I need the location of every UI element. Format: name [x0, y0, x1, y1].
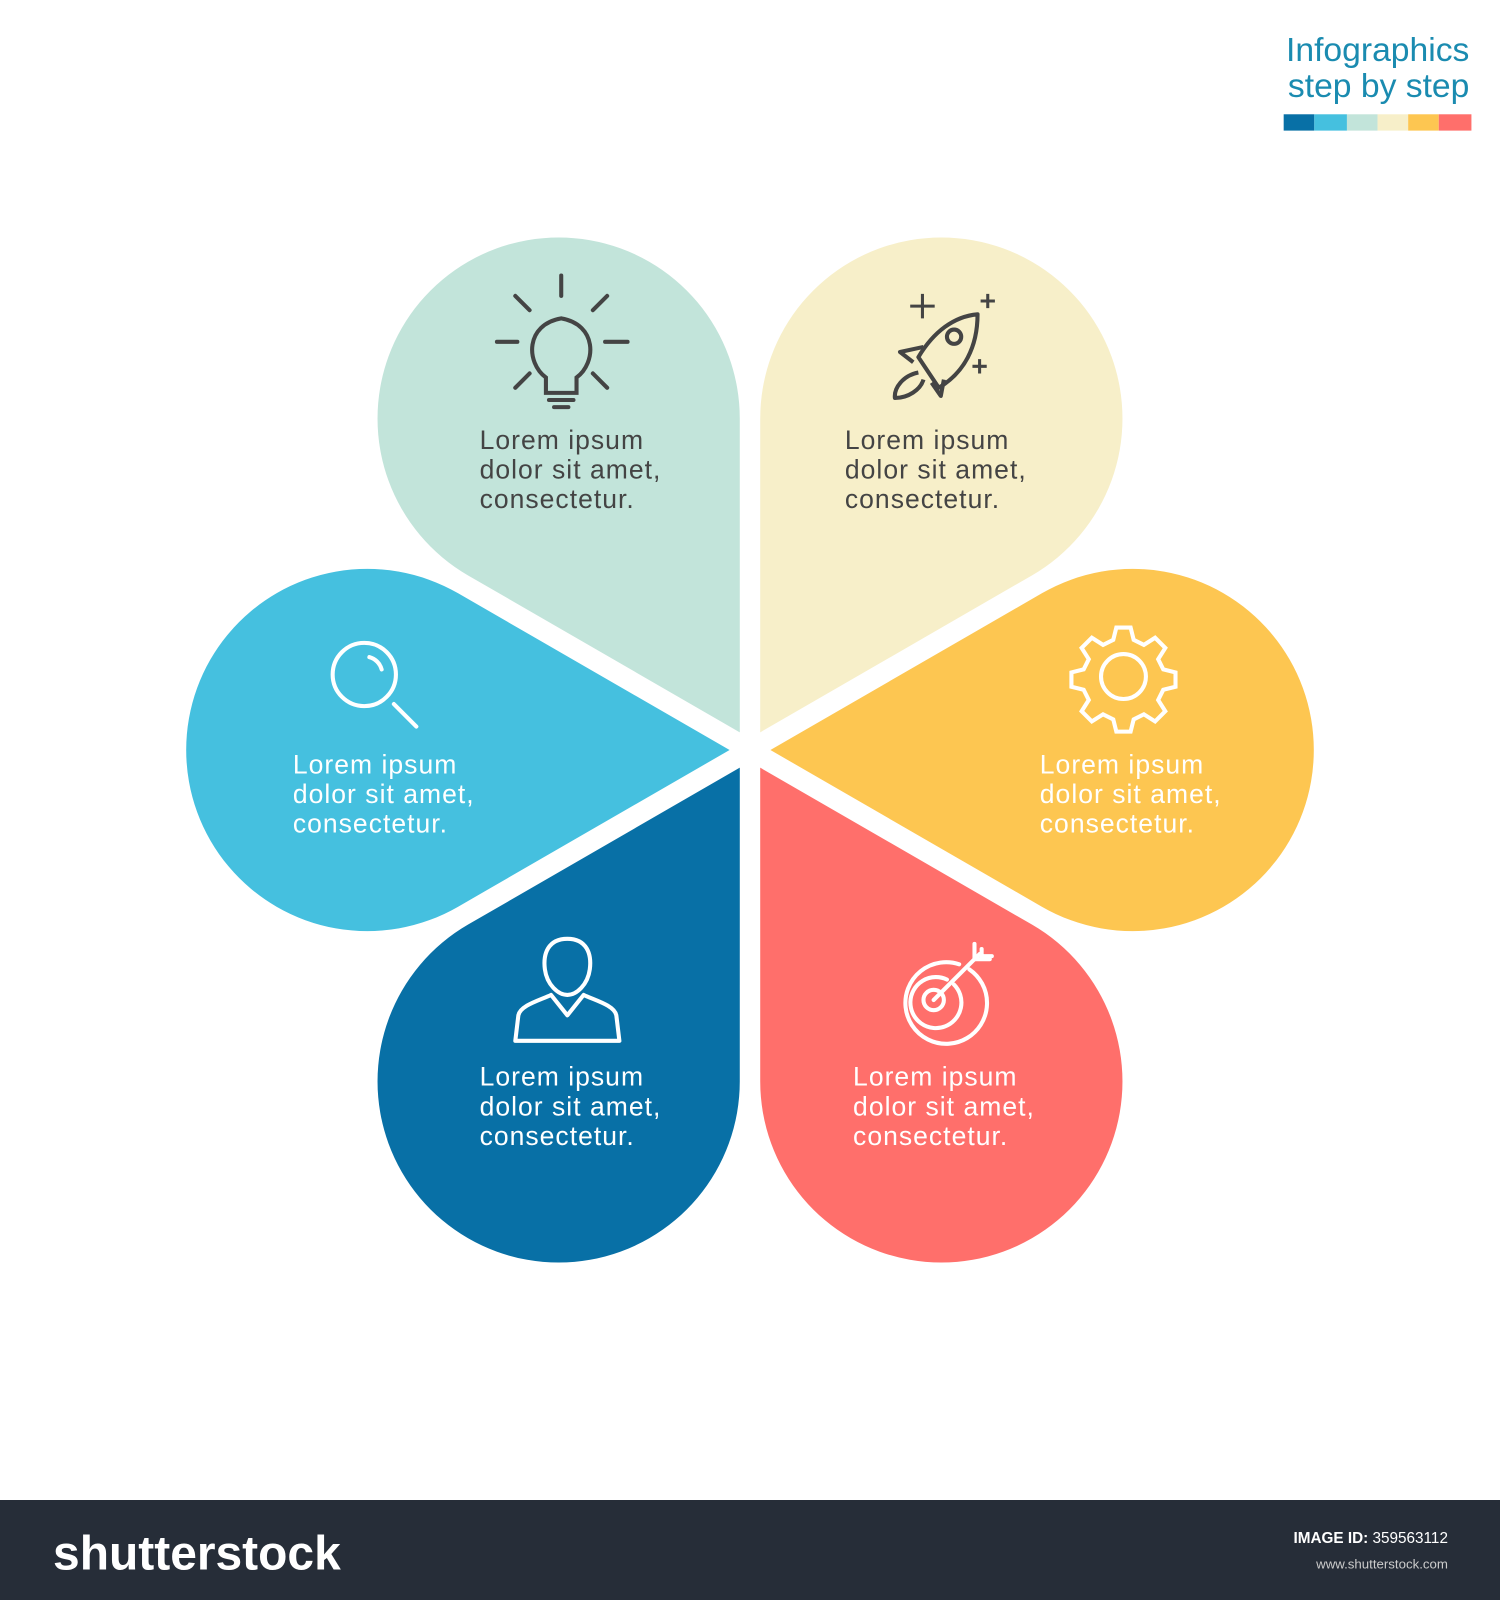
icon: rocket: [895, 294, 995, 398]
title: Infographics: [1286, 32, 1469, 69]
text: [845, 425, 1027, 514]
text: consectetur.: [853, 1121, 1008, 1151]
text: dolor sit amet,: [480, 455, 661, 485]
petal: top-left (idea): [311, 171, 897, 823]
text: consectetur.: [480, 1121, 635, 1151]
petal: top-right (rocket): [603, 171, 1189, 823]
text: Lorem ipsum: [845, 425, 1009, 455]
text: consectetur.: [293, 809, 448, 839]
icon: person: [515, 939, 619, 1041]
text: [853, 1062, 1035, 1151]
footer bar: www.shutterstock.com: [1315, 1556, 1448, 1571]
text: consectetur.: [1040, 809, 1195, 839]
text: dolor sit amet,: [853, 1091, 1035, 1121]
text: Lorem ipsum: [480, 425, 644, 455]
text: [480, 1062, 661, 1151]
icon: light bulb: [497, 276, 628, 407]
icon: target: [905, 944, 992, 1044]
petal: bottom-right (target): [603, 677, 1189, 1329]
title: step by step: [1288, 68, 1469, 105]
text: Lorem ipsum: [1040, 749, 1204, 779]
text: Lorem ipsum: [853, 1062, 1018, 1092]
text: consectetur.: [480, 484, 635, 514]
text: dolor sit amet,: [293, 779, 475, 809]
petal: left (search): [186, 569, 730, 931]
footer bar: [0, 1500, 1500, 1600]
text: [1040, 749, 1222, 839]
color legend bar: [1284, 114, 1471, 131]
text: Lorem ipsum: [293, 749, 457, 779]
petal: bottom-left (person): [311, 677, 897, 1329]
text: dolor sit amet,: [480, 1091, 661, 1121]
text: Lorem ipsum: [480, 1062, 644, 1092]
petal: right (gear): [770, 569, 1314, 931]
title: [1286, 32, 1469, 105]
footer image id: IMAGE ID: 359563112: [1293, 1530, 1448, 1547]
text: [293, 749, 475, 839]
text: consectetur.: [845, 484, 1000, 514]
footer logo: shutterstock: [53, 1527, 341, 1580]
icon: gear: [1071, 628, 1176, 732]
text: dolor sit amet,: [1040, 779, 1222, 809]
text: dolor sit amet,: [845, 455, 1027, 485]
icon: magnifier: [333, 643, 416, 727]
text: [480, 425, 661, 514]
